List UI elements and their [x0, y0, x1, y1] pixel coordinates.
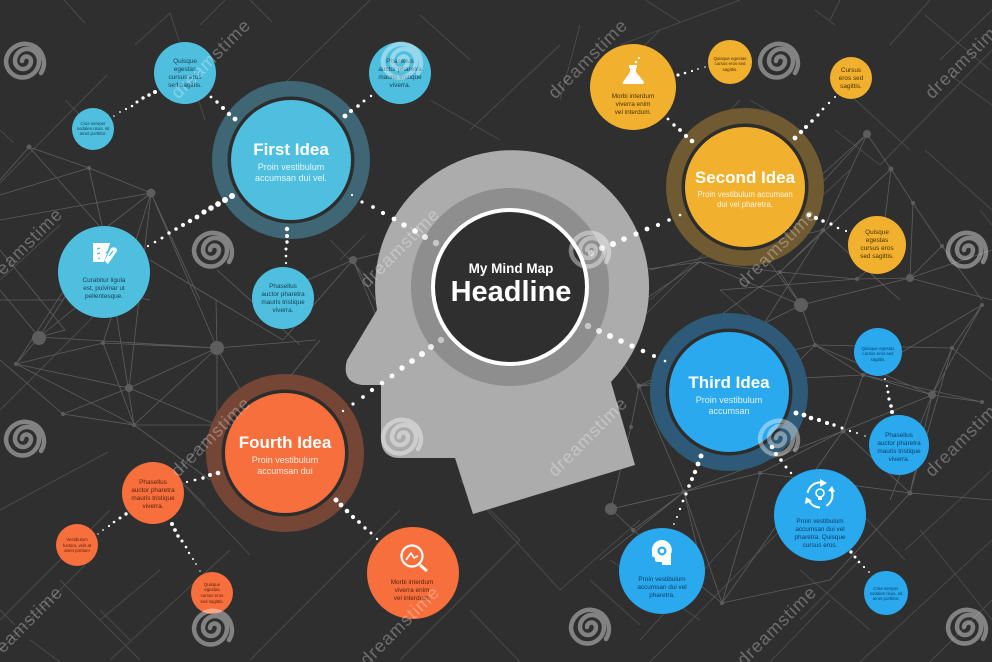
node: second idea, morbi with icon: Morbi interdum: [612, 93, 654, 100]
panel: first idea: accumsan dui vel.: [255, 173, 327, 183]
watermark text: dreamstime: [733, 204, 821, 292]
head ring: [411, 188, 609, 386]
node: second idea, cursus: Cursus: [841, 67, 861, 74]
node: second idea, quisque: egestas: [866, 237, 888, 244]
node: first idea, phasellus top: mauris tristique: [378, 74, 422, 81]
node: fourth idea, phasellus: viverra.: [143, 503, 164, 510]
panel: third idea: [669, 332, 789, 452]
node: first idea, quisque: [154, 42, 216, 104]
node: second idea, morbi with icon: viverra enim: [616, 101, 650, 108]
headline text: [451, 261, 571, 308]
node: third idea, phasellus: [869, 415, 929, 475]
node: fourth idea, quisque: Quisque: [204, 582, 221, 587]
node: first idea, quisque: egestas: [174, 66, 196, 73]
node: second idea, quisque small: cursus eros sed: [714, 61, 746, 66]
node: second idea, quisque: sed sagittis.: [860, 253, 894, 260]
node: fourth idea, morbi with icon: vel interdum.: [394, 595, 431, 602]
halo rings: [206, 81, 824, 532]
node: first idea, quisque: cursus eros: [168, 74, 202, 81]
node: second idea, quisque: Quisque: [865, 229, 889, 236]
node: third idea, proin with head icon: accumsan dui vel: [637, 584, 687, 591]
node: first idea, curabitur with icon: [58, 226, 150, 318]
node: first idea, quisque: sed sagittis.: [168, 82, 202, 89]
panel: third idea: Proin vestibulum: [696, 395, 762, 405]
node: third idea, proin with cycle icon: Proin vestibulum: [796, 518, 844, 525]
node: fourth idea, quisque: cursus eros: [201, 593, 224, 598]
node: first idea, phasellus bottom: [252, 267, 314, 329]
node: first idea, curabitur with icon: est, pulvinar ut: [83, 285, 125, 292]
node: second idea, quisque: cursus eros: [860, 245, 894, 252]
node: first idea, cras: Cras semper: [80, 121, 106, 126]
node: second idea, quisque small: sagittis.: [723, 67, 737, 72]
node: third idea, quisque tiny: cursus eros sed: [862, 351, 894, 356]
node: fourth idea, vestibulum: fuctors, velit at: [63, 543, 92, 548]
node: first idea, phasellus bottom: mauris tristique: [261, 299, 305, 306]
headline text: Headline: [451, 276, 571, 308]
panel: third idea: accumsan: [708, 406, 750, 416]
watermark text: dreamstime: [167, 15, 255, 103]
node: first idea, phasellus bottom: Phasellus: [269, 283, 297, 290]
node: first idea, phasellus top: [369, 42, 431, 104]
watermark text: dreamstime: [167, 393, 255, 481]
panel: second idea: dui vel pharetra.: [717, 200, 773, 209]
panel: first idea: [231, 100, 351, 220]
node: third idea, quisque tiny: [854, 328, 902, 376]
panel: fourth idea: Fourth Idea: [239, 433, 332, 452]
watermark text: dreamstime: [356, 204, 444, 292]
node: first idea, curabitur with icon: Curabitur ligula: [83, 277, 126, 284]
node: fourth idea, quisque: egestas: [204, 587, 220, 592]
node: fourth idea, phasellus: Phasellus: [139, 479, 167, 486]
node: first idea, phasellus top: auctor pharetra: [378, 66, 422, 73]
node: third idea, cras: sodales risus, sit: [870, 591, 903, 596]
node: second idea, cursus: [830, 57, 872, 99]
node: first idea, cras: amet porttitor.: [80, 131, 106, 136]
node: third idea, proin with cycle icon: [774, 469, 866, 561]
panel: fourth idea: [225, 393, 345, 513]
panel: fourth idea: Proin vestibulum: [252, 455, 318, 465]
node: third idea, proin with cycle icon: pharetra. Quisque: [794, 534, 846, 541]
panel: fourth idea: accumsan dui: [257, 466, 313, 476]
node: fourth idea, phasellus: [122, 462, 184, 524]
watermark text: dreamstime: [544, 15, 632, 103]
panel: second idea: [685, 127, 805, 247]
node: first idea, phasellus bottom: viverra.: [273, 307, 294, 314]
icon: bulb cycle: [805, 479, 835, 508]
panel: second idea: Second Idea: [695, 168, 796, 187]
node: third idea, phasellus: auctor pharetra: [877, 440, 921, 447]
node: third idea, proin with head icon: Proin vestibulum: [638, 576, 686, 583]
node: fourth idea, morbi with icon: [367, 527, 459, 619]
node: third idea, proin with head icon: [619, 528, 705, 614]
node: second idea, morbi with icon: [590, 44, 676, 130]
node: fourth idea, quisque: [191, 572, 233, 614]
node: first idea, phasellus top: viverra.: [390, 82, 411, 89]
connector dots: [97, 66, 894, 573]
node: fourth idea, vestibulum: [56, 524, 98, 566]
node: third idea, proin with head icon: pharetra.: [649, 592, 675, 599]
node: third idea, cras: amet porttitor.: [873, 596, 899, 601]
headline text: My Mind Map: [469, 261, 553, 276]
node: third idea, phasellus: Phasellus: [885, 432, 913, 439]
node: fourth idea, quisque: sed sagittis.: [200, 599, 224, 604]
node: third idea, cras: Cras semper: [873, 586, 899, 591]
panel: second idea: Proin vestibulum accumsan: [697, 190, 793, 199]
node: third idea, phasellus: mauris tristique: [877, 448, 921, 455]
node: third idea, cras: [864, 571, 908, 615]
node: fourth idea, phasellus: mauris tristique: [131, 495, 175, 502]
node: first idea, phasellus bottom: auctor pharetra: [261, 291, 305, 298]
watermark text: dreamstime: [544, 393, 632, 481]
node: fourth idea, vestibulum: amet pretium: [64, 548, 90, 553]
icon: magnifier: [402, 546, 427, 571]
node: third idea, quisque tiny: Quisque egestas: [862, 346, 895, 351]
central circle: [433, 210, 587, 364]
node: second idea, quisque: [848, 216, 906, 274]
node: second idea, morbi with icon: vel interdum.: [615, 109, 652, 116]
network nodes: [14, 130, 984, 605]
icon: gear head: [652, 540, 672, 565]
node: first idea, phasellus top: Phasellus: [386, 58, 414, 65]
node: second idea, cursus: eros sed: [839, 75, 864, 82]
node: second idea, quisque small: [708, 40, 752, 84]
node: fourth idea, morbi with icon: viverra enim: [395, 587, 429, 594]
panel: first idea: Proin vestibulum: [258, 162, 324, 172]
node: third idea, proin with cycle icon: cursus eros.: [803, 542, 838, 549]
head silhouette: [346, 150, 649, 514]
node: first idea, curabitur with icon: pellentesque.: [85, 293, 123, 300]
node: third idea, quisque tiny: sagittis.: [871, 357, 885, 362]
node: second idea, cursus: sagittis.: [840, 83, 862, 90]
icon: notes: [93, 243, 117, 264]
node: first idea, cras: [72, 108, 114, 150]
node: fourth idea, vestibulum: Vestibulum: [66, 537, 88, 542]
node: first idea, cras: sodales risus, sit: [77, 126, 110, 131]
node: fourth idea, phasellus: auctor pharetra: [131, 487, 175, 494]
panel: first idea: First Idea: [253, 140, 329, 159]
node: fourth idea, morbi with icon: Morbi interdum: [391, 579, 433, 586]
node: third idea, proin with cycle icon: accumsan dui vel: [795, 526, 845, 533]
panel: third idea: Third Idea: [688, 373, 770, 392]
node: first idea, quisque: Quisque: [173, 58, 197, 65]
icon: flask: [623, 57, 644, 84]
node: third idea, phasellus: viverra.: [889, 456, 910, 463]
node: second idea, quisque small: Quisque egestas: [714, 56, 747, 61]
